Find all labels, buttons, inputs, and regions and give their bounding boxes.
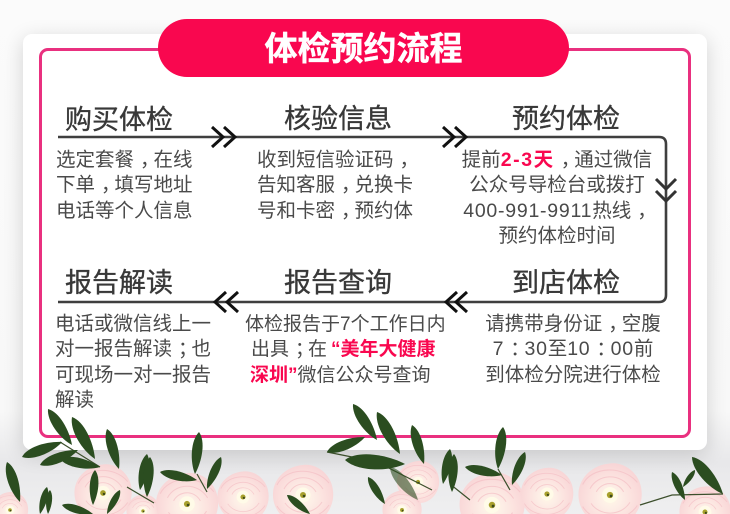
step 3 text: 预约体检时间 xyxy=(498,225,616,247)
step 1 heading: 购买体检 xyxy=(65,105,173,135)
step 4 text: 请携带身份证 空腹 xyxy=(485,313,661,335)
step 1 text: ， xyxy=(101,174,121,196)
pink frame xyxy=(39,48,691,438)
step 6 text: ； xyxy=(178,338,198,360)
step 4 text: ： xyxy=(596,338,617,360)
step 2 text: ， xyxy=(341,200,361,222)
step 2 text: 收到短信验证码 xyxy=(257,149,394,171)
step 1 text xyxy=(56,149,193,222)
leaves xyxy=(2,401,727,514)
step 4 text: ， xyxy=(608,313,628,335)
step 4 heading: 到店体检 xyxy=(512,268,620,298)
title pill: 体检预约流程 xyxy=(264,30,462,67)
step 6 heading: 报告解读 xyxy=(65,268,173,298)
step 3 text: 400-991-9911热线 xyxy=(463,200,631,222)
step 5 text: ； xyxy=(295,339,314,360)
step 3 text: 公众号导检台或拨打 xyxy=(469,174,645,196)
step 4 text: ： xyxy=(510,338,530,360)
step 3 text: 提前2-3天 通过微信 xyxy=(462,149,652,171)
step 6 text: 可现场一对一报告 xyxy=(55,364,211,386)
step 2 heading: 核验信息 xyxy=(284,104,392,134)
flowers xyxy=(0,461,730,514)
title pill xyxy=(158,19,569,77)
step 2 text: 告知客服 兑换卡 xyxy=(257,174,413,196)
step 5 text: 体检报告于7个工作日内 xyxy=(245,314,446,335)
step 2 text: 号和卡密 预约体 xyxy=(257,200,413,222)
step 5 text: 深圳”微信公众号查询 xyxy=(250,365,431,386)
step 6 text: 解读 xyxy=(55,389,94,411)
step 4 text xyxy=(485,313,661,386)
step 6 text xyxy=(55,313,211,411)
step 6 text: 对一报告解读 也 xyxy=(55,338,211,360)
step 2 text: ， xyxy=(341,174,361,196)
step 3 text xyxy=(462,149,657,247)
branches xyxy=(60,442,723,505)
step 2 text xyxy=(257,149,419,222)
step 5 heading: 报告查询 xyxy=(284,268,392,298)
step 1 text: ， xyxy=(140,149,160,171)
white card xyxy=(23,34,707,450)
step 3 heading: 预约体检 xyxy=(512,104,620,134)
step 4 text: 到体检分院进行体检 xyxy=(485,364,661,386)
step 5 text: 出具 在“美年大健康 xyxy=(251,339,436,360)
step 3 text: ， xyxy=(637,200,657,222)
step 5 text xyxy=(245,314,446,386)
step 1 text: 电话等个人信息 xyxy=(56,200,193,222)
step 1 text: 下单 填写地址 xyxy=(56,174,193,196)
step 6 text: 电话或微信线上一 xyxy=(55,313,211,335)
step 2 text: ， xyxy=(400,149,419,171)
step 4 text: 7 30至10 00前 xyxy=(493,338,653,360)
step 1 text: 选定套餐 在线 xyxy=(56,149,193,171)
step 3 text: ， xyxy=(561,149,580,171)
